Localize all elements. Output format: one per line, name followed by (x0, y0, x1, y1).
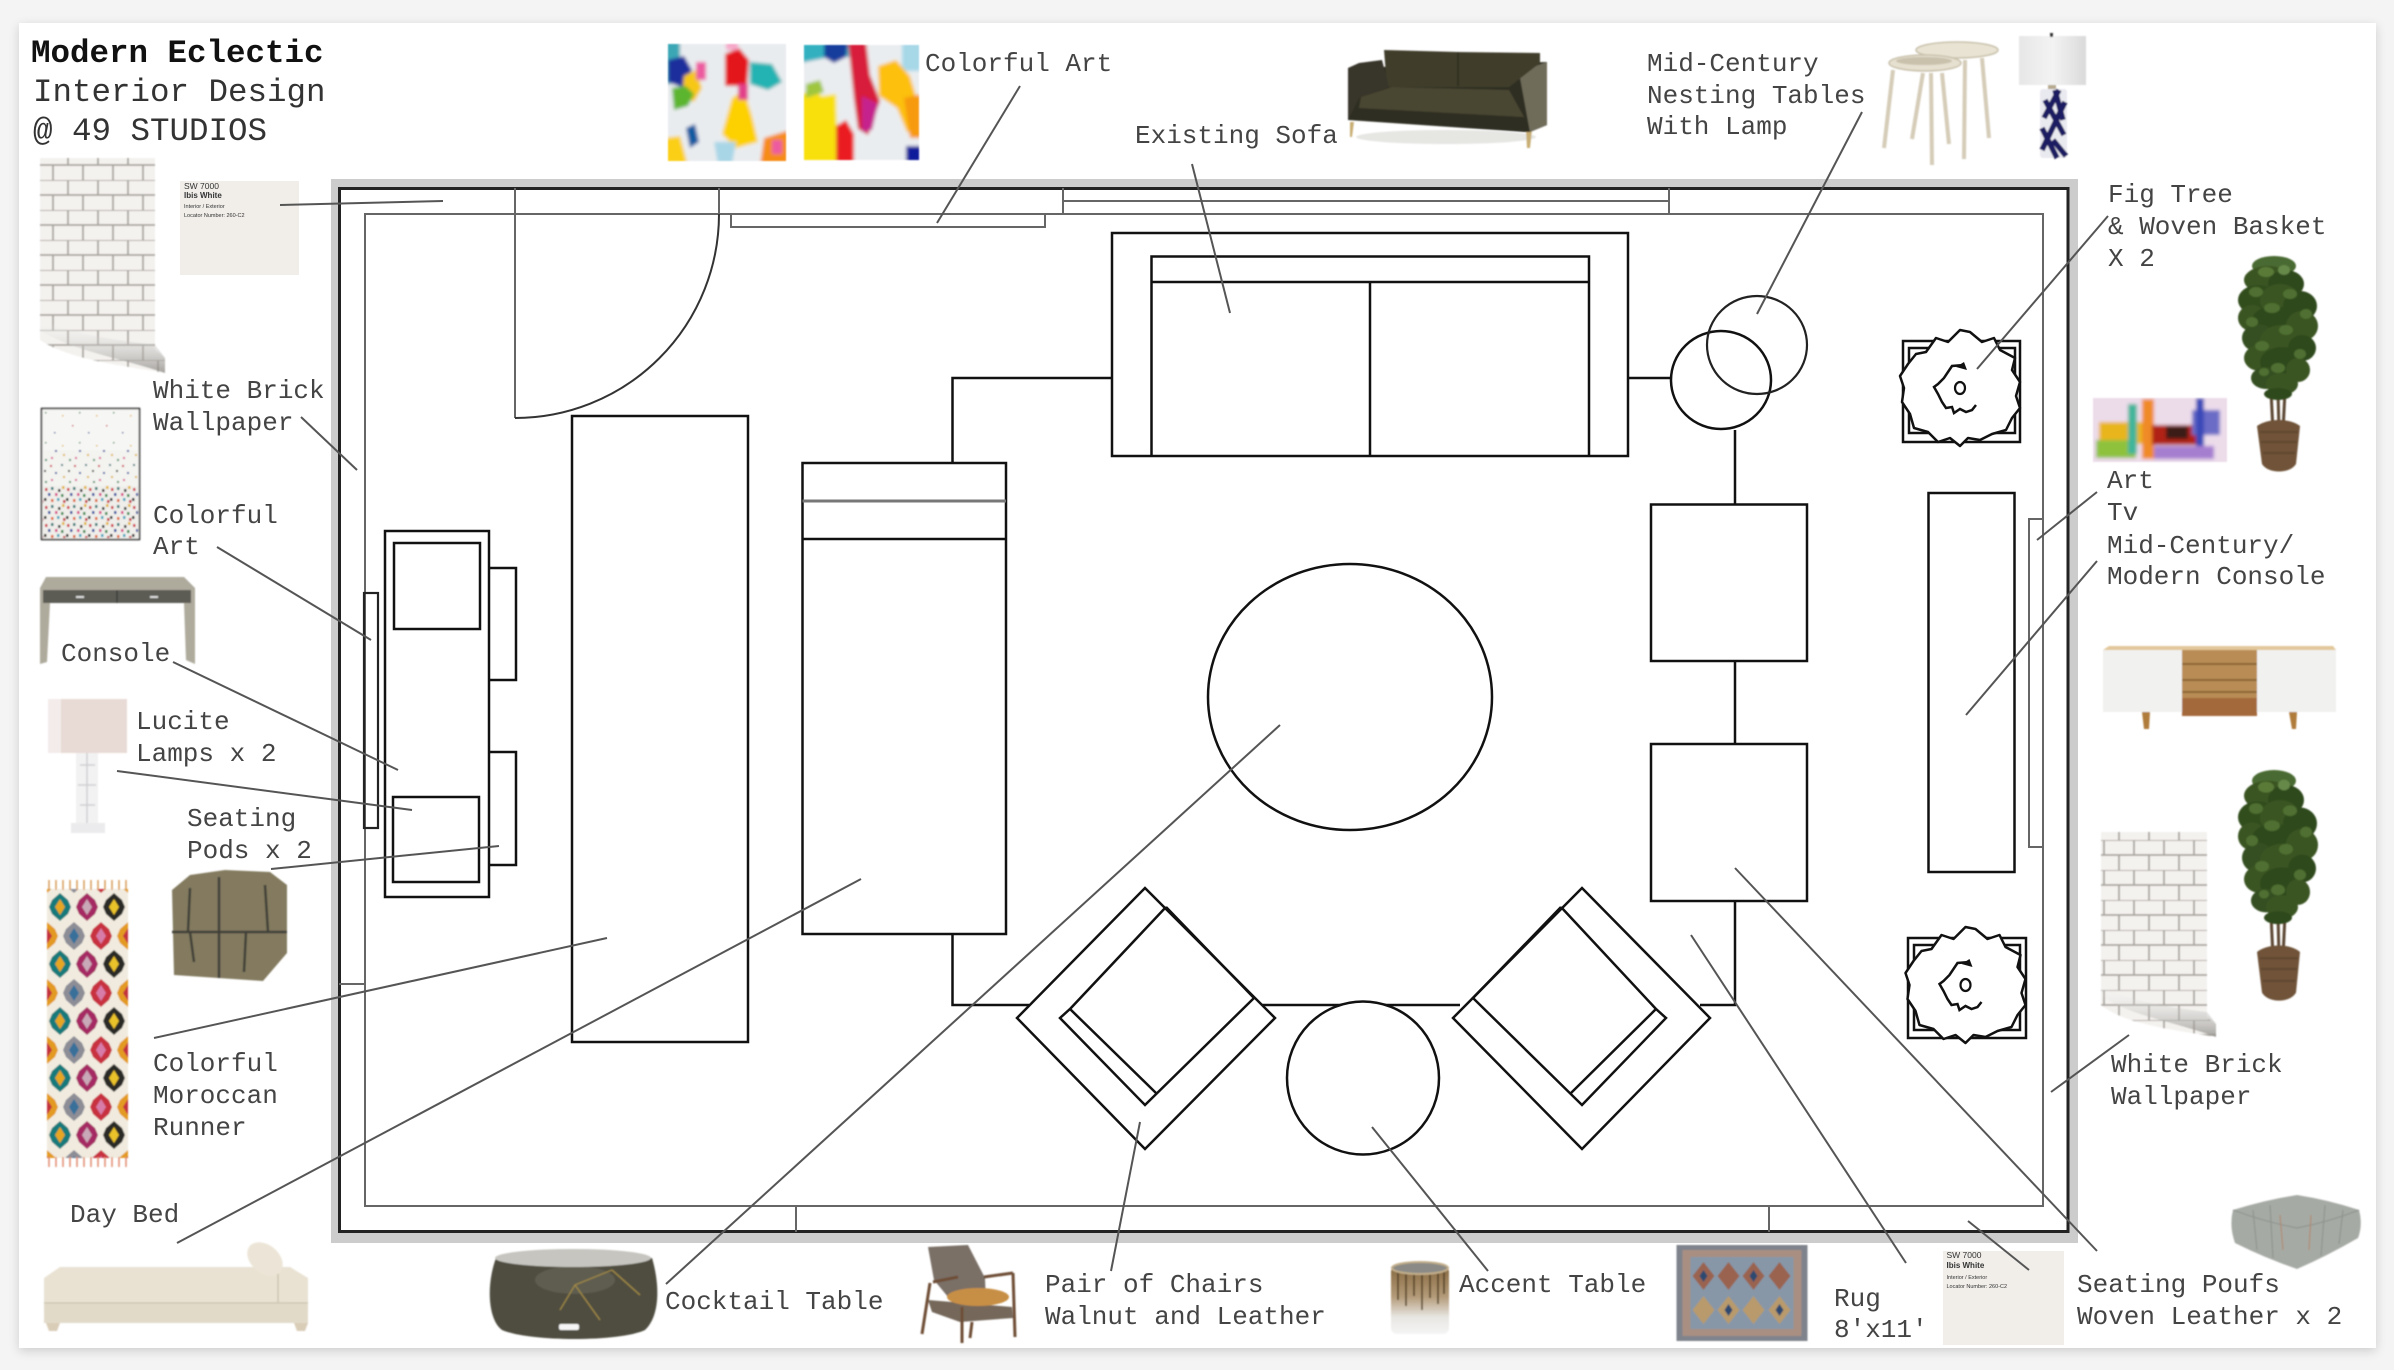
side table squares (1651, 504, 1807, 901)
label: accent table: Accent Table (1459, 1270, 1646, 1300)
leader: rug (1691, 935, 1906, 1263)
leader lines (117, 86, 2129, 1284)
sofa plan (1112, 233, 1628, 456)
leader: fig tree (1977, 216, 2108, 369)
label: moroccan runner: Colorful (153, 1049, 278, 1079)
label: lucite lamps: Lucite (136, 707, 230, 737)
exterior wall (331, 179, 2078, 1243)
coffee table plan (1208, 564, 1492, 830)
room inner wall line (365, 214, 2043, 1206)
fig tree bottom (2238, 770, 2318, 1001)
chair plan right (1453, 888, 1710, 1149)
label: white brick left: White Brick (153, 376, 325, 406)
label: day bed: Day Bed (70, 1200, 179, 1230)
leader: white brick left (301, 417, 357, 470)
tv console plan (1928, 493, 2014, 872)
fig tree top (2238, 256, 2318, 472)
leader: tv console (1966, 561, 2097, 715)
accent table photo (1391, 1262, 1449, 1334)
left wall and bottom wall ticks (339, 984, 1769, 1232)
left console plan (364, 531, 516, 897)
leader: cocktail table (666, 725, 1280, 1284)
walnut chair photo (922, 1245, 1015, 1343)
moroccan runner photo (47, 880, 128, 1167)
label: white brick left: Wallpaper (153, 408, 293, 438)
paint swatch bottom (1943, 1250, 2064, 1345)
accent table plan (1287, 1002, 1439, 1154)
daybed photo (44, 1235, 308, 1331)
leader: nesting tables (1757, 112, 1862, 314)
paint swatch top: SW 7000 (184, 181, 219, 191)
woven pouf photo (2231, 1195, 2361, 1269)
floor plan (331, 179, 2078, 1243)
seating pod photo (172, 870, 287, 981)
label: seating poufs: Woven Leather x 2 (2077, 1302, 2342, 1332)
paint swatch top (180, 181, 299, 275)
cocktail table photo (490, 1249, 657, 1339)
paint swatch bottom: SW 7000 (1946, 1250, 1982, 1260)
leader: chairs (1111, 1122, 1140, 1271)
title: Modern Eclectic (31, 35, 324, 72)
rug outline (952, 378, 1735, 1005)
room outer outline (340, 188, 2068, 1232)
art above tv photo (2092, 397, 2228, 462)
leader: colorful art top (937, 86, 1020, 223)
label: colorful art top: Colorful Art (925, 49, 1112, 79)
label: colorful art left: Art (153, 532, 200, 562)
white brick wallpaper right (2101, 832, 2216, 1037)
leader: lucite lamps (117, 771, 412, 810)
chair plan left (1017, 888, 1275, 1149)
colorful art 2 (802, 44, 920, 162)
label: nesting tables: With Lamp (1647, 112, 1787, 142)
label: white brick right: Wallpaper (2111, 1082, 2251, 1112)
leader: moroccan runner (154, 938, 607, 1038)
label: existing sofa: Existing Sofa (1135, 121, 1338, 151)
nesting tables plan (1671, 296, 1807, 429)
leader: tv art (2037, 492, 2097, 540)
label: nesting tables: Nesting Tables (1647, 81, 1865, 111)
title: @ 49 STUDIOS (33, 113, 267, 150)
leader: white brick right (2051, 1035, 2129, 1092)
label: moroccan runner: Runner (153, 1113, 247, 1143)
label: moroccan runner: Moroccan (153, 1081, 278, 1111)
label: nesting tables: Mid-Century (1647, 49, 1819, 79)
nesting tables photo (1884, 42, 1998, 165)
label: fig tree: X 2 (2108, 244, 2155, 274)
leader: existing sofa (1192, 164, 1230, 313)
leader: paint top (280, 201, 443, 205)
label: rug: Rug (1834, 1284, 1881, 1314)
leader: seating poufs (1735, 868, 2097, 1251)
label: seating pods: Seating (187, 804, 296, 834)
label: art tv console: Tv (2107, 498, 2138, 528)
table lamp photo (2019, 33, 2086, 158)
colorful confetti art (42, 408, 140, 540)
console photo (40, 577, 195, 664)
wall art on top wall (731, 214, 1045, 227)
white brick wallpaper left (40, 158, 165, 373)
door with swing arc (515, 188, 719, 418)
label: white brick right: White Brick (2111, 1050, 2283, 1080)
persian rug photo (1676, 1245, 1808, 1341)
label: seating poufs: Seating Poufs (2077, 1270, 2280, 1300)
paint swatch top: Locator Number: 260-C2 (184, 213, 245, 219)
title: Interior Design (33, 74, 326, 111)
leader: colorful art left (217, 547, 371, 640)
label: art tv console: Art (2107, 466, 2154, 496)
label: chairs: Walnut and Leather (1045, 1302, 1326, 1332)
plant plan bottom (1906, 927, 2026, 1043)
label: colorful art left: Colorful (153, 501, 278, 531)
leader: day bed (177, 879, 861, 1243)
label: fig tree: & Woven Basket (2108, 212, 2326, 242)
label: console: Console (61, 639, 170, 669)
mid-century console photo (2103, 646, 2336, 729)
paint swatch bottom: Interior / Exterior (1946, 1275, 1987, 1281)
label: art tv console: Modern Console (2107, 562, 2325, 592)
runner plan (572, 416, 748, 1042)
label: seating pods: Pods x 2 (187, 836, 312, 866)
sofa photo (1348, 50, 1547, 148)
label: cocktail table: Cocktail Table (665, 1287, 883, 1317)
leader: console (173, 662, 398, 770)
lucite lamp photo (48, 699, 127, 833)
colorful art 1 (666, 42, 788, 162)
title (31, 35, 326, 150)
label: lucite lamps: Lamps x 2 (136, 739, 276, 769)
tv plan (2029, 519, 2043, 847)
leader: seating pods (271, 846, 499, 869)
plant plan top (1900, 330, 2020, 446)
paint swatch bottom: Locator Number: 260-C2 (1946, 1284, 2007, 1290)
leader: paint bottom (1968, 1221, 2029, 1270)
label: fig tree: Fig Tree (2108, 180, 2233, 210)
paint swatch top: Interior / Exterior (184, 204, 225, 210)
label: rug: 8′x11′ (1834, 1315, 1928, 1345)
leader: accent table (1372, 1127, 1488, 1271)
label: art tv console: Mid-Century/ (2107, 531, 2294, 561)
paint swatch top: Ibis White (184, 191, 222, 200)
daybed plan (802, 463, 1006, 934)
label: chairs: Pair of Chairs (1045, 1270, 1263, 1300)
window (1063, 188, 1669, 214)
paint swatch bottom: Ibis White (1946, 1261, 1985, 1270)
